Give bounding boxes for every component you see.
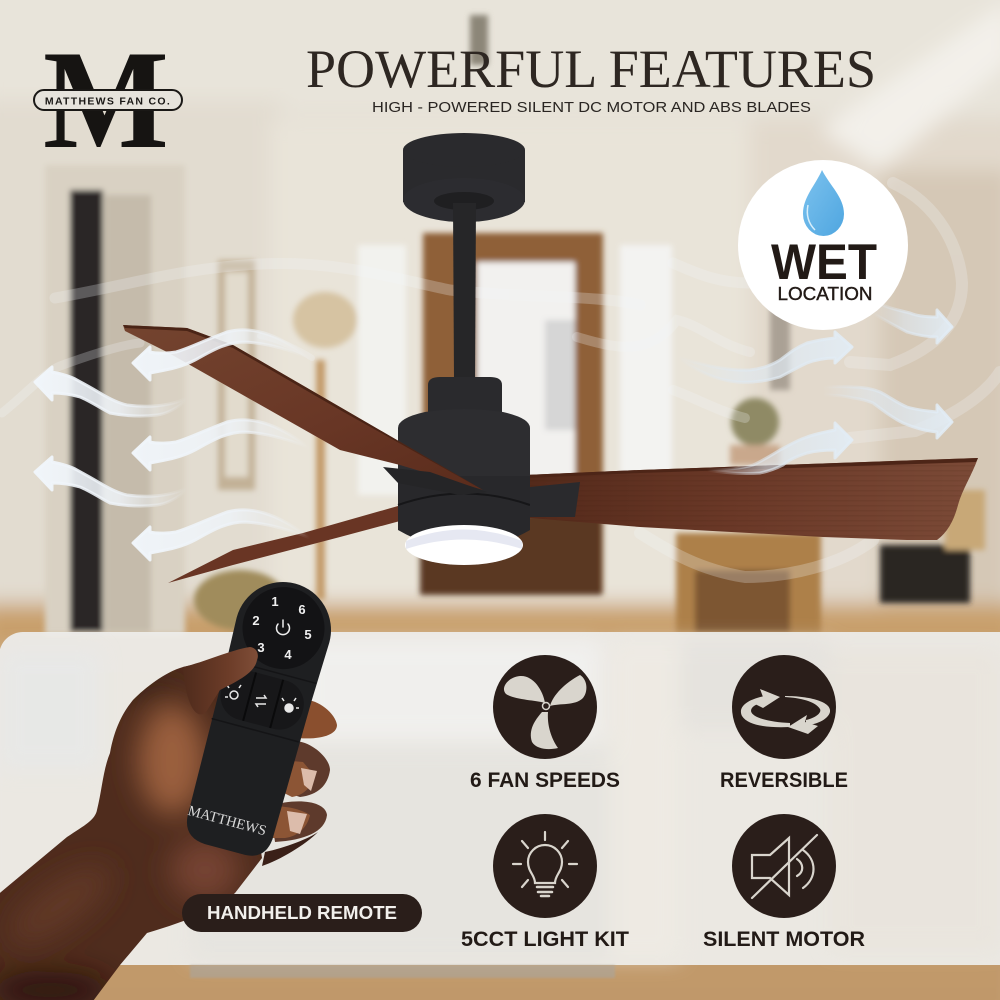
fingers (262, 700, 337, 866)
badge: wet location (738, 160, 908, 330)
airflow arrow: left upper outer (35, 367, 187, 416)
logo monogram M: M (43, 22, 169, 178)
fan blade: right (525, 458, 978, 540)
LED light (405, 525, 523, 565)
remote brand text: MATTHEWS (186, 803, 268, 839)
label pill: handheld remote (182, 894, 422, 932)
remote speed numbers (252, 594, 312, 662)
blade bracket right (530, 482, 580, 517)
airflow arrow: right upper inner (677, 332, 852, 382)
remote function icons (225, 685, 299, 712)
remote speed numbers: 2 (252, 613, 260, 628)
icon: reverse arrows (741, 689, 830, 734)
hand holding remote (0, 571, 342, 1000)
icon: muted speaker (752, 835, 817, 898)
airflow arrow: right lower inner (707, 423, 852, 473)
remote speed numbers: 4 (284, 647, 292, 662)
airflow arrow: left middle inner (133, 420, 310, 470)
thumb (183, 647, 258, 714)
remote power icon (276, 620, 290, 635)
arm and palm (0, 665, 262, 1000)
label: SILENT MOTOR (703, 928, 865, 951)
motor housing (398, 377, 530, 549)
remote speed numbers: 6 (298, 602, 306, 617)
airflow arrow: right lower outer (823, 387, 952, 438)
label: 6 FAN SPEEDS (470, 769, 620, 792)
door frames and background objects (45, 165, 185, 635)
canopy (403, 133, 525, 222)
remote speed numbers: 3 (257, 640, 265, 655)
label pill: handheld remote: HANDHELD REMOTE (207, 903, 397, 923)
feature: silent motor (703, 814, 865, 951)
airflow arrow: right upper outer (872, 303, 952, 343)
badge text LOCATION: LOCATION (778, 284, 872, 304)
frosted bottom panel (0, 632, 1000, 978)
icon: light bulb (513, 832, 577, 896)
blade bracket left (383, 467, 487, 495)
feature: reversible (720, 655, 848, 792)
icon: water drop (803, 170, 844, 236)
feature: 6 fan speeds (470, 655, 620, 792)
subtitle: HIGH - POWERED SILENT DC MOTOR AND ABS BLADES (372, 100, 811, 116)
icon: fan (504, 675, 586, 749)
remote speed numbers: 1 (271, 594, 279, 609)
label: 5CCT LIGHT KIT (461, 928, 629, 951)
ceiling fan (123, 133, 978, 583)
badge text WET: WET (771, 234, 877, 290)
logo: Matthews Fan Co. (34, 22, 182, 178)
remote speed numbers: 5 (304, 627, 312, 642)
airflow arrow: left lower inner (133, 510, 310, 560)
fan blade: upper left (123, 325, 483, 490)
airflow arrow: left lower outer (35, 457, 187, 506)
label: REVERSIBLE (720, 769, 848, 792)
title: POWERFUL FEATURES (306, 39, 876, 99)
feature: 5CCT light kit (461, 814, 629, 951)
logo name pill (34, 90, 182, 110)
faint airflow bands (2, 183, 1000, 577)
airflow arrow: left upper inner (133, 330, 310, 380)
downrod (453, 203, 476, 380)
logo name pill: MATTHEWS FAN CO. (45, 96, 171, 108)
fan blade: lower left (168, 506, 400, 583)
remote control (178, 571, 342, 862)
